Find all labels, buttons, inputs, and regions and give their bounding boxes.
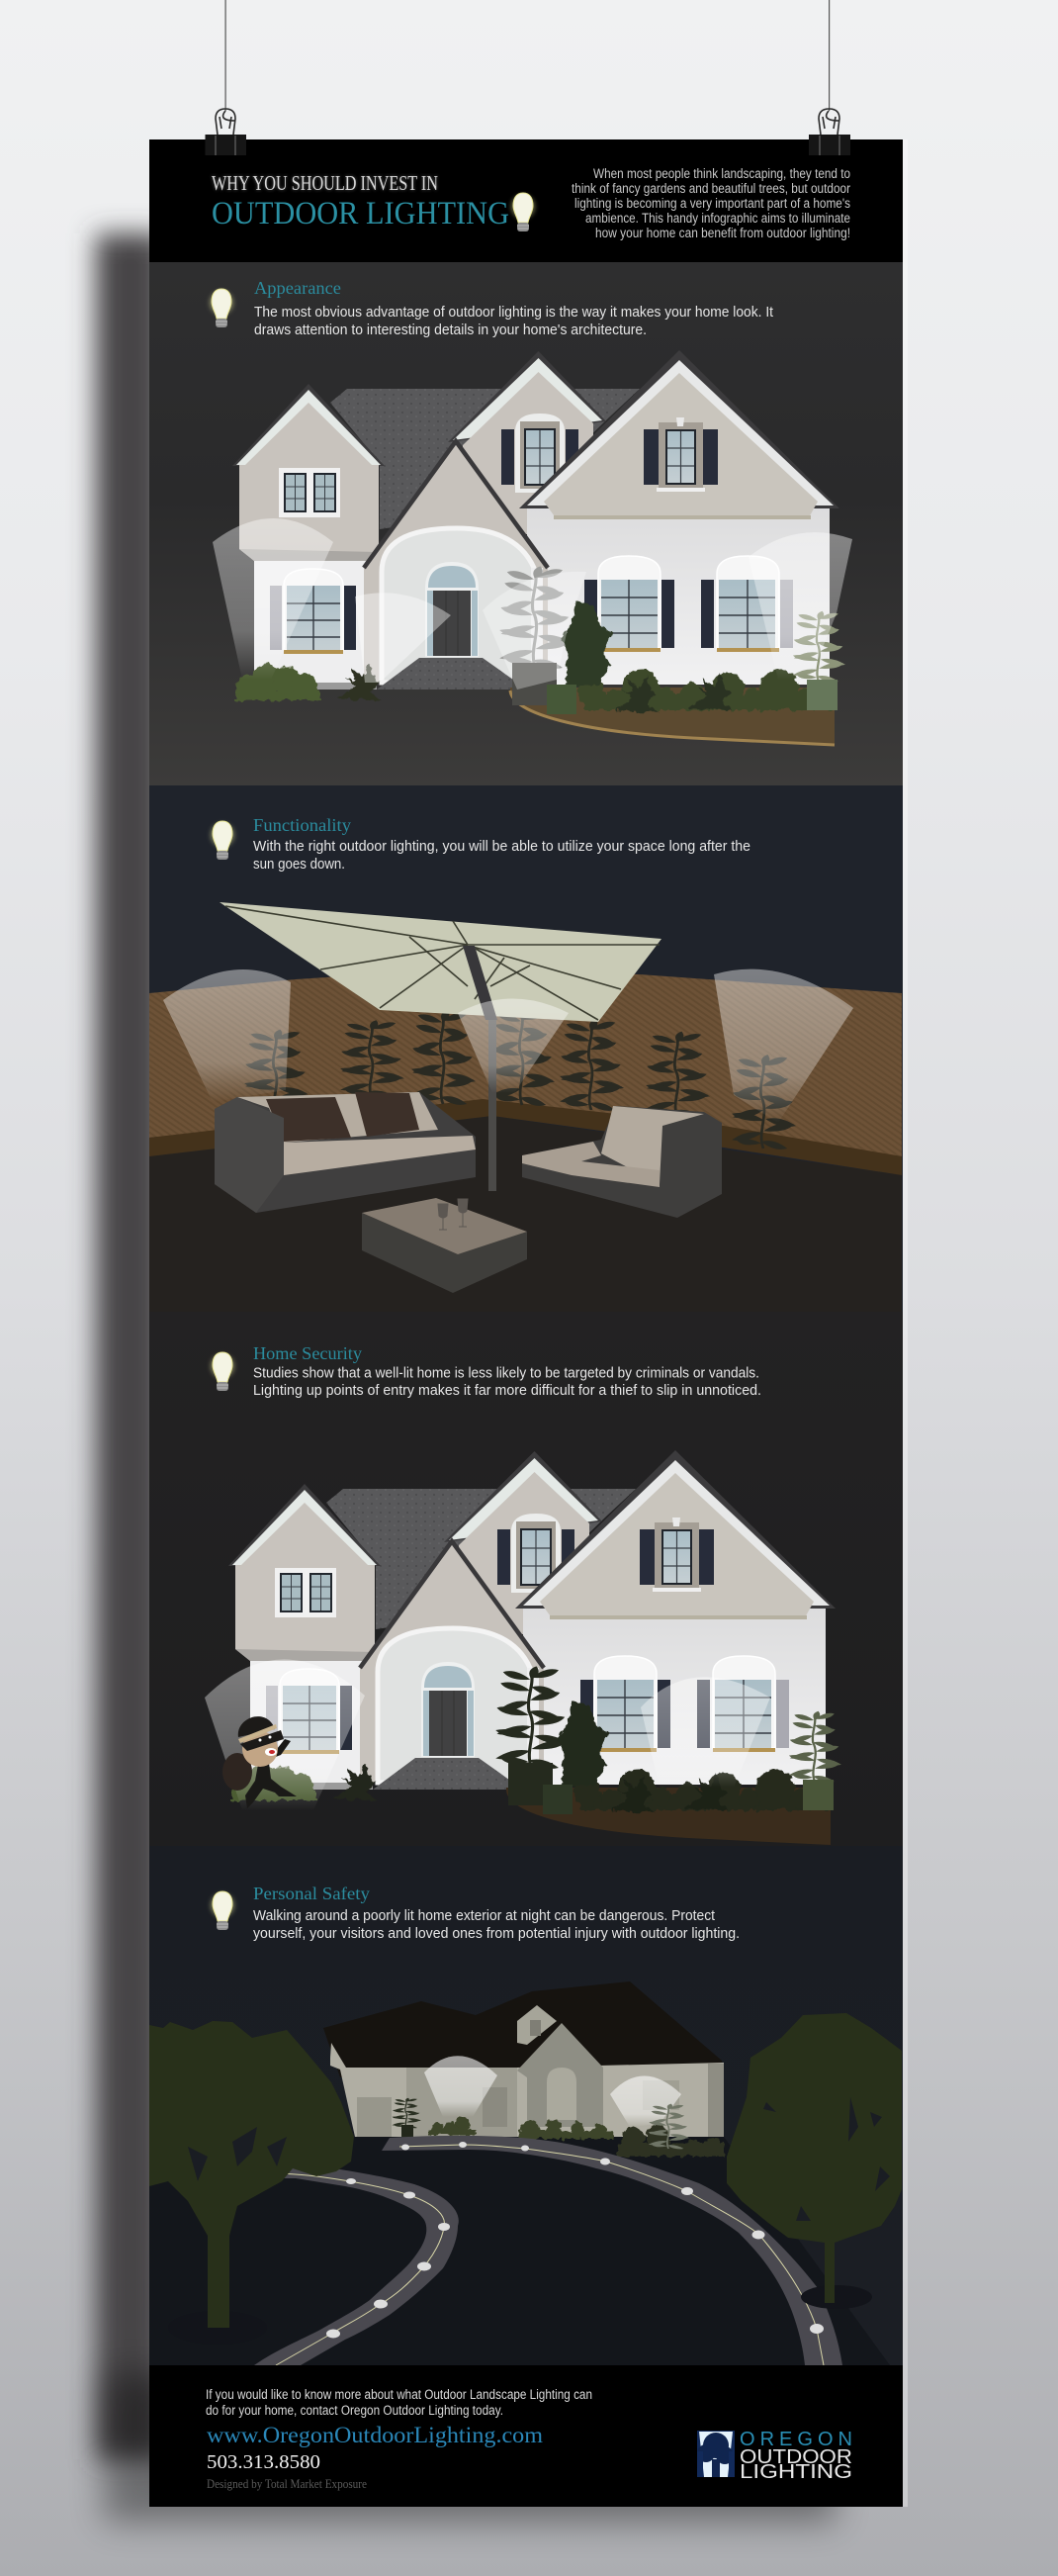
functionality heading: Functionality [253,815,351,835]
patio ground [149,1116,902,1312]
coffee table [362,1198,527,1293]
potted plant [392,2098,689,2149]
panel: functionality [149,785,903,1312]
background wall shadow cast by poster [96,139,908,2523]
functionality text [253,839,750,873]
logo: OREGON [740,2429,852,2450]
header intro text: think of fancy gardens and beautiful trees, but outdoor [572,181,850,196]
light beams [163,969,853,1123]
sofa right [522,1106,722,1218]
footer text [206,2387,592,2418]
driveway lane [382,2136,842,2365]
appearance text: The most obvious advantage of outdoor lighting is the way it makes your home look. It [254,305,773,321]
safety text: yourself, your visitors and loved ones from potential injury with outdoor lighting. [253,1926,740,1942]
poster [149,139,903,2507]
appearance text: draws attention to interesting details in your home's architecture. [254,322,647,338]
icon: safety bulb [211,1891,234,1930]
header title: OUTDOOR LIGHTING [212,196,509,231]
footer text: If you would like to know more about what Outdoor Landscape Lighting can [206,2387,592,2402]
driveway surface [149,2137,890,2365]
security text: Lighting up points of entry makes it far more difficult for a thief to slip in unnoticed. [253,1383,761,1399]
website: www.OregonOutdoorLighting.com [207,2423,543,2447]
illustration: night house and driveway [149,1981,902,2365]
safety text [253,1908,740,1942]
safety heading: Personal Safety [253,1884,370,1903]
footer text: do for your home, contact Oregon Outdoor Lighting today. [206,2403,503,2418]
credit: Designed by Total Market Exposure [207,2477,367,2491]
header intro text: When most people think landscaping, they tend to [593,166,850,181]
light beams [424,2056,681,2127]
foundation plants [428,2117,725,2157]
light beams [205,1659,770,1810]
header intro text: ambience. This handy infographic aims to illuminate [585,211,850,226]
binder clip left [206,109,246,155]
centre lines [247,2145,824,2365]
logo icon [697,2431,735,2477]
icon: security bulb [211,1352,234,1391]
garden bed [510,688,835,745]
phone: 503.313.8580 [207,2451,320,2473]
fence plants [244,1009,796,1150]
tree left [149,2021,354,2345]
header panel [149,139,903,262]
security text [253,1365,761,1399]
fence base [149,1099,902,1175]
panel: home security [149,1312,903,1846]
functionality text: sun goes down. [253,857,345,873]
panel: personal safety [149,1846,903,2365]
header intro text: how your home can benefit from outdoor lighting! [595,226,850,240]
path lights [273,2142,824,2339]
garden bed [506,1788,831,1845]
light beams [213,518,852,690]
hanging wire left [225,0,226,111]
icon: functionality bulb [211,821,234,860]
burglar [222,1716,297,1808]
functionality text: With the right outdoor lighting, you will be able to utilize your space long after the [253,839,750,855]
binder clip right [809,109,850,155]
icon: appearance bulb [210,289,233,327]
illustration: house with intruder [205,1450,841,1845]
header intro text: lighting is becoming a very important part of a home's [574,196,850,211]
shrubs [235,566,845,714]
illustration: lit house [213,350,852,745]
panel: appearance [149,262,903,785]
sofa left [215,1092,476,1213]
shrubs [231,1666,841,1814]
appearance text [254,305,773,338]
header title [212,171,509,231]
security text: Studies show that a well-lit home is less likely to be targeted by criminals or vandals. [253,1365,759,1381]
security heading: Home Security [253,1343,362,1363]
logo [697,2429,852,2483]
logo: LIGHTING [740,2461,852,2483]
fence [149,969,902,1156]
icon: title bulb [511,193,535,231]
logo: OUTDOOR [740,2446,852,2468]
tree right [727,2013,902,2309]
illustration: patio [163,902,853,1293]
road curve [247,2166,459,2365]
umbrella [220,902,661,1191]
appearance heading: Appearance [254,278,341,298]
footer [149,2365,903,2507]
wine glasses [438,1199,468,1230]
house [323,1981,724,2137]
header intro text [572,166,850,240]
header title: WHY YOU SHOULD INVEST IN [212,171,438,195]
safety text: Walking around a poorly lit home exterior at night can be dangerous. Protect [253,1908,715,1924]
hanging wire right [829,0,830,111]
